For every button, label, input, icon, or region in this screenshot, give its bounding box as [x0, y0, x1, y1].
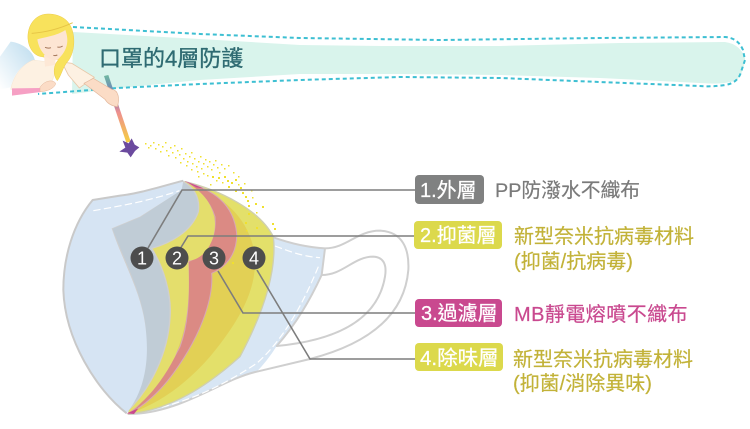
label: layer 1: PP防潑水不織布 — [495, 180, 640, 202]
front blue panel — [63, 181, 183, 413]
front panel outline — [63, 181, 183, 413]
heading: 口罩的4層防護 — [99, 46, 243, 71]
label: layer 2: 2.抑菌層 — [420, 224, 497, 247]
number markers: 1 — [137, 248, 147, 268]
sparkles — [145, 142, 276, 264]
label: layer 4: (抑菌/消除異味) — [513, 372, 652, 395]
label: layer 2: 新型奈米抗病毒材料 — [514, 225, 694, 248]
layer 4 inner tone — [128, 182, 255, 414]
icon: wing — [0, 42, 35, 89]
layer 3: filter pink — [128, 182, 237, 414]
fairy headband — [32, 23, 73, 33]
label: layer 1 — [415, 175, 640, 204]
wand — [104, 75, 131, 143]
fairy sleeve — [62, 62, 94, 88]
fairy hair back — [28, 14, 74, 81]
fairy illustration — [0, 14, 139, 157]
ear loop — [128, 231, 408, 414]
layer 4: deodorising yellow — [128, 182, 274, 414]
fairy pink cuff — [12, 88, 41, 96]
icon: star — [119, 138, 139, 157]
number markers: 4 — [249, 248, 259, 268]
title banner — [38, 27, 745, 94]
number markers: 3 — [209, 248, 219, 268]
fairy body — [11, 60, 58, 91]
label: layer 1: 1.外層 — [420, 179, 477, 202]
fairy neck — [44, 55, 56, 67]
layer 1: outer grey panel — [112, 182, 199, 412]
fairy face — [37, 30, 67, 60]
fairy hand — [40, 81, 56, 92]
front panel stitching — [93, 191, 179, 211]
mask tips — [127, 181, 203, 414]
number markers — [130, 246, 266, 270]
layer 2: antibacterial yellow — [128, 182, 215, 413]
label: layer 3: 3.過濾層 — [421, 302, 498, 325]
label: layer 2 — [414, 221, 694, 273]
back blue layer — [128, 237, 325, 414]
label: layer 4 — [415, 343, 693, 395]
label: layer 4: 新型奈米抗病毒材料 — [513, 348, 693, 371]
fairy features — [45, 46, 63, 56]
mask diagram — [63, 181, 408, 414]
label: layer 3: MB靜電熔噴不織布 — [514, 303, 688, 326]
number markers: 2 — [172, 248, 182, 268]
back panel stitching — [157, 246, 320, 408]
leader lines — [148, 190, 415, 359]
fairy arm and hand — [84, 78, 119, 107]
label: layer 2: (抑菌/抗病毒) — [514, 250, 633, 273]
label: layer 3 — [415, 299, 688, 327]
label: layer 4: 4.除味層 — [420, 347, 499, 370]
